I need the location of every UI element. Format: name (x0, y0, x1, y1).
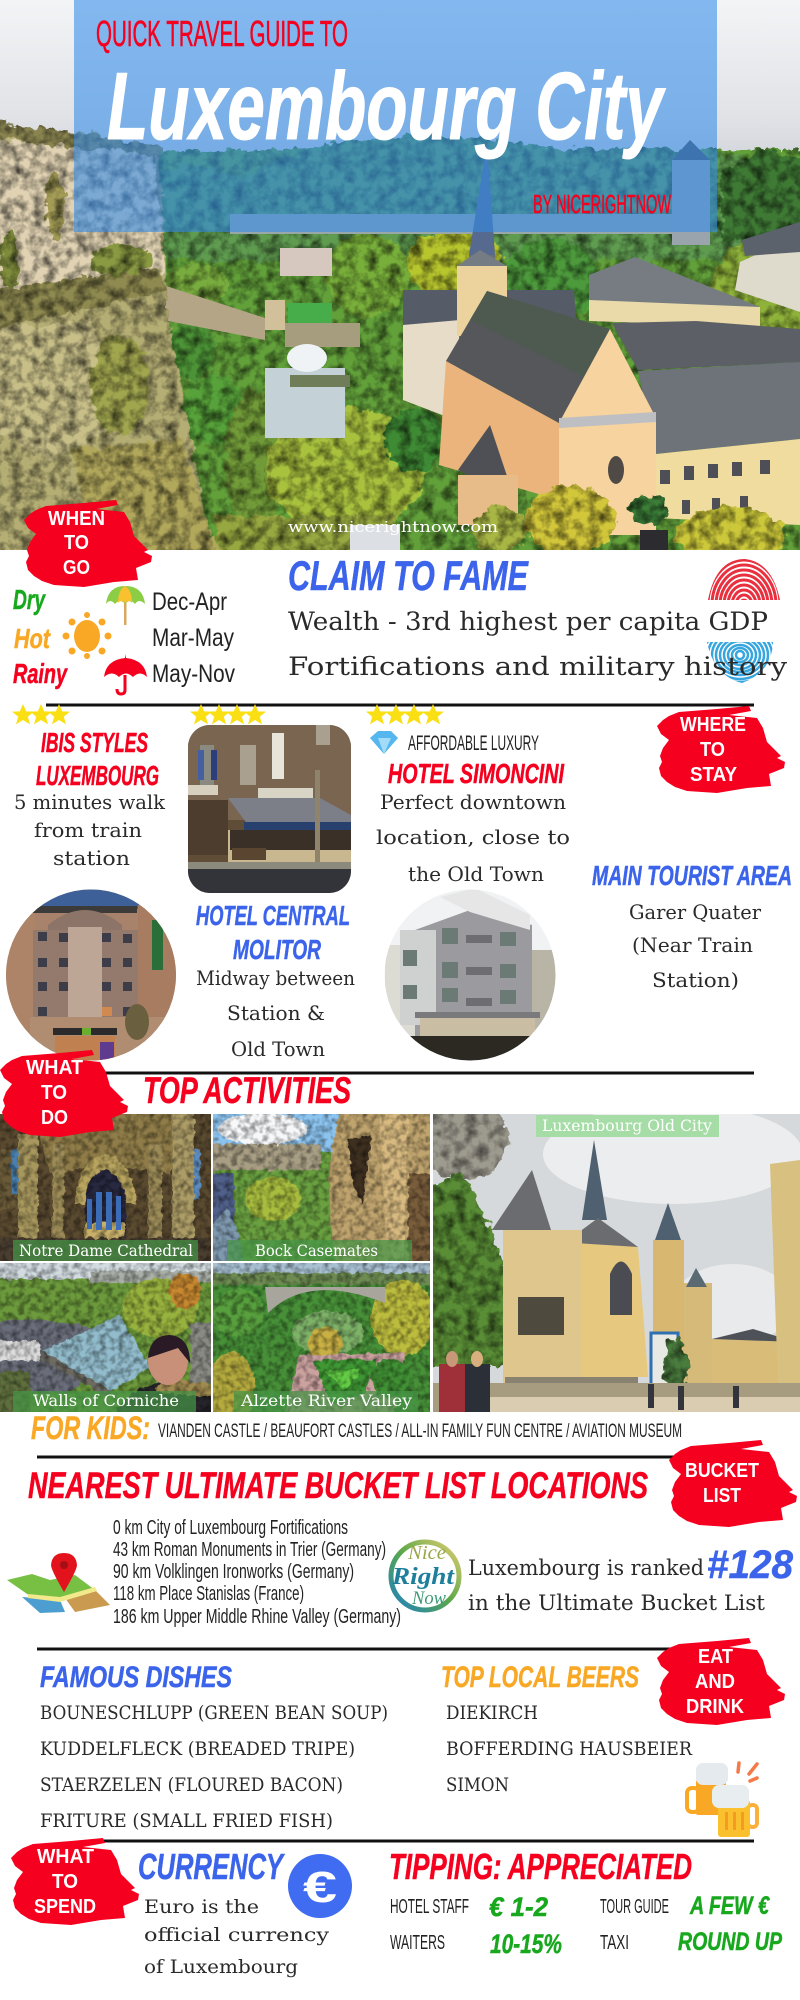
church and buildings (589, 257, 760, 307)
panel: eat and drink (40, 1661, 757, 1837)
photo: luxembourg old city (433, 1114, 800, 1412)
hotel area: main tourist area: Garer Quater (629, 900, 761, 924)
hotel: simoncini text: Perfect downtown (380, 790, 566, 814)
claim: wealth: Wealth - 3rd highest per capita GDP (288, 607, 768, 636)
icon: diamond (370, 731, 398, 754)
label: rainy: Rainy (13, 658, 68, 689)
badge: where to stay: TO (700, 739, 725, 761)
photo label: alzette river valley: Alzette River Valley (240, 1391, 412, 1410)
label: dry: Dry (13, 584, 46, 615)
row: tour guide: A FEW € (689, 1892, 770, 1920)
beers list: BOFFERDING HAUSBEIER (446, 1738, 693, 1760)
hotel: central molitor text: Station & (227, 1001, 325, 1025)
row: waiters (390, 1929, 562, 1959)
badge: where to stay: STAY (690, 764, 738, 786)
row: taxi (600, 1928, 782, 1956)
badge: eat and drink: DRINK (686, 1696, 744, 1718)
distance list: 90 km Volklingen Ironworks (Germany) (113, 1561, 354, 1583)
icon: beer mugs (687, 1763, 757, 1837)
for kids line (31, 1410, 682, 1446)
icon: red fingerprint (708, 559, 780, 600)
heading: TIPPING: APPRECIATED (389, 1846, 692, 1887)
icon: sun (62, 612, 112, 659)
row: waiters: 10-15% (490, 1929, 562, 1959)
distance list: 43 km Roman Monuments in Trier (Germany) (113, 1539, 386, 1561)
badge: eat and drink (657, 1638, 785, 1725)
badge: what to do (0, 1050, 128, 1137)
panel: top activities photos (0, 1099, 800, 1424)
beers list: DIEKIRCH (446, 1702, 538, 1724)
for kids line: FOR KIDS: (31, 1410, 150, 1446)
ranking text (468, 1543, 794, 1615)
logo: nice right now: Now (411, 1588, 446, 1609)
hotel area: main tourist area: Station) (652, 968, 739, 992)
badge: what to spend: WHAT (37, 1846, 94, 1868)
row: tour guide (600, 1892, 770, 1920)
hotel: simoncini text: the Old Town (408, 862, 544, 886)
row: hotel staff: € 1-2 (489, 1892, 548, 1922)
hotel: central molitor text (196, 900, 355, 1061)
badge: bucket list (669, 1440, 797, 1527)
description (144, 1896, 329, 1978)
photo label: bock casemates: Bock Casemates (255, 1241, 378, 1260)
logo: nice right now: Nice (407, 1542, 446, 1564)
logo: nice right now: Right (391, 1564, 455, 1590)
byline: BY NICERIGHTNOW (533, 189, 671, 219)
months: Dec-Apr (152, 588, 227, 616)
foreground yellow trees (472, 485, 785, 563)
panel: currency (138, 1846, 352, 1978)
title banner: translucent blue panel (74, 0, 717, 232)
distance list: 118 km Place Stanislas (France) (113, 1583, 304, 1605)
ranking text: in the Ultimate Bucket List (468, 1591, 766, 1615)
badge: when to go: TO (64, 532, 89, 554)
left fortress wall (0, 120, 220, 560)
photo: notre dame cathedral (0, 1114, 211, 1261)
badge: where to stay: WHERE (680, 714, 746, 736)
rank number: #128 (707, 1543, 794, 1587)
icon: rain umbrella (104, 654, 147, 694)
photo label: bock casemates (227, 1240, 412, 1261)
months (152, 588, 235, 688)
badge: what to spend (11, 1838, 139, 1925)
hotel: central molitor text: HOTEL CENTRAL (196, 900, 350, 931)
row: hotel staff: HOTEL STAFF (390, 1896, 469, 1918)
hotel area: main tourist area: (Near Train (632, 933, 753, 957)
distance list: 0 km City of Luxembourg Fortifications (113, 1517, 348, 1539)
stars: ibis (12, 704, 70, 724)
row: taxi: TAXI (600, 1932, 629, 1954)
heading: CLAIM TO FAME (288, 552, 529, 599)
icon: beach umbrella (106, 586, 145, 625)
heading: top activities: TOP ACTIVITIES (143, 1070, 351, 1111)
row: tour guide: TOUR GUIDE (600, 1896, 669, 1918)
dishes list: STAERZELEN (FLOURED BACON) (40, 1774, 343, 1796)
distance list (113, 1517, 401, 1628)
description: of Luxembourg (144, 1956, 298, 1978)
hotel: ibis styles text: LUXEMBOURG (36, 760, 159, 791)
distance list: 186 km Upper Middle Rhine Valley (Germany) (113, 1606, 401, 1628)
badge: when to go: WHEN (48, 508, 105, 530)
hotel: ibis styles text: from train (34, 818, 142, 842)
beers list: SIMON (446, 1774, 509, 1796)
hotel: central molitor text: Midway between (196, 966, 355, 990)
icon: euro coin (288, 1854, 352, 1918)
badge: eat and drink: AND (695, 1671, 735, 1693)
heading: CURRENCY (138, 1846, 285, 1887)
ranking text: Luxembourg is ranked (468, 1556, 704, 1580)
beers list (446, 1702, 693, 1796)
label: hot: Hot (14, 623, 51, 654)
badge: what to do: WHAT (26, 1057, 83, 1079)
icon: blue fingerprint (707, 642, 773, 683)
hotel: simoncini text: location, close to (376, 825, 570, 849)
photo label: notre dame cathedral: Notre Dame Cathedral (19, 1241, 193, 1260)
icon: euro coin: € (303, 1863, 337, 1912)
icon: map pin (7, 1553, 110, 1613)
heading: top local beers: TOP LOCAL BEERS (441, 1661, 639, 1694)
photo: hotel central molitor (188, 725, 351, 893)
hotel: simoncini text: HOTEL SIMONCINI (388, 758, 565, 789)
website url: www.nicerightnow.com (288, 518, 498, 536)
hotel area: main tourist area (592, 860, 792, 992)
panel: tipping (389, 1846, 782, 1959)
hero photo: Luxembourg valley (0, 0, 800, 550)
months: May-Nov (152, 660, 235, 688)
panel: when to go seasons (13, 584, 235, 694)
badge: when to go (24, 500, 152, 587)
description: Euro is the (144, 1896, 259, 1918)
hotel: ibis styles text: 5 minutes walk (14, 790, 166, 814)
dishes list: BOUNESCHLUPP (GREEN BEAN SOUP) (40, 1702, 388, 1724)
row: hotel staff (390, 1892, 548, 1922)
stars: simoncini (366, 704, 444, 724)
logo: nice right now (391, 1542, 459, 1610)
dishes list: KUDDELFLECK (BREADED TRIPE) (40, 1738, 355, 1760)
hotel: ibis styles text (14, 727, 166, 870)
photo: alzette river valley (213, 1263, 430, 1412)
hotel: ibis styles text: station (53, 846, 130, 870)
photo: hotel simoncini (380, 885, 560, 1065)
badge: bucket list: LIST (703, 1485, 741, 1507)
badge: what to spend: SPEND (34, 1896, 96, 1918)
dishes list: FRITURE (SMALL FRIED FISH) (40, 1810, 333, 1832)
photo label: walls of corniche: Walls of Corniche (33, 1391, 179, 1410)
panel: bucket list (7, 1465, 794, 1628)
photo: bock casemates (213, 1114, 430, 1261)
description: official currency (144, 1924, 329, 1946)
photo: walls of corniche (0, 1263, 211, 1412)
hotel: simoncini text (370, 731, 570, 886)
heading: famous dishes: FAMOUS DISHES (40, 1661, 232, 1694)
hotel: central molitor text: Old Town (231, 1037, 325, 1061)
badge: what to spend: TO (52, 1871, 78, 1893)
panel: claim to fame (288, 552, 788, 685)
hotel: ibis styles text: IBIS STYLES (41, 727, 148, 758)
panel: where to stay (0, 704, 792, 1065)
photo label: luxembourg old city: Luxembourg Old City (542, 1116, 712, 1135)
stars: molitor (190, 704, 266, 724)
hotel: central molitor text: MOLITOR (233, 934, 322, 965)
badge: where to stay (657, 706, 785, 793)
badge: bucket list: BUCKET (685, 1460, 759, 1482)
badge: when to go: GO (63, 557, 90, 579)
months: Mar-May (152, 624, 234, 652)
badge: what to do: TO (41, 1082, 67, 1104)
badge: what to do: DO (41, 1107, 68, 1129)
photo: ibis styles (6, 890, 176, 1060)
tag: affordable luxury: AFFORDABLE LUXURY (408, 732, 539, 755)
overline: quick travel guide: QUICK TRAVEL GUIDE TO (96, 13, 348, 54)
dishes list (40, 1702, 388, 1832)
badge: eat and drink: EAT (698, 1646, 733, 1668)
claim: fortifications: Fortifications and military history (288, 652, 788, 681)
row: waiters: WAITERS (390, 1932, 445, 1954)
